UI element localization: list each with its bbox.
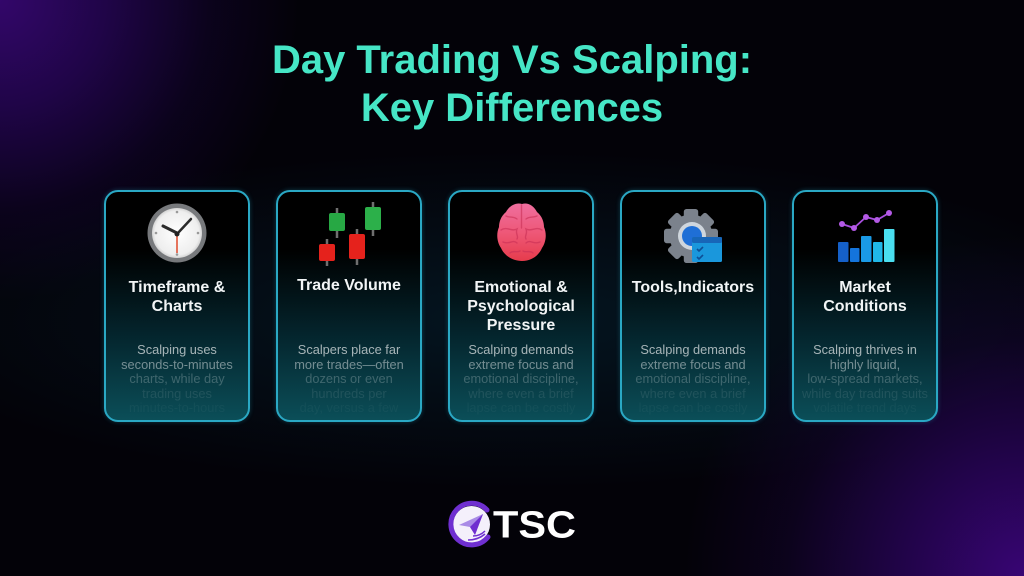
heading: Trade Volume <box>297 277 401 294</box>
heading: Charts <box>152 298 202 315</box>
panel: trade volume <box>276 190 422 422</box>
heading: Emotional & <box>474 279 568 296</box>
heading <box>128 279 225 315</box>
body text: Scalping thrives in <box>813 342 917 357</box>
body text: emotional discipline, <box>463 371 579 386</box>
panel: market conditions <box>792 190 938 422</box>
body text: while day trading suits <box>802 386 928 401</box>
body text: Scalping demands <box>468 342 574 357</box>
body text <box>802 342 928 415</box>
heading: Tools,Indicators <box>632 279 754 296</box>
heading: Psychological <box>467 298 575 315</box>
body text: Scalping uses <box>137 342 217 357</box>
body text: low-spread markets, <box>807 371 923 386</box>
icon: gear with checklist <box>664 209 722 263</box>
body text: extreme focus and <box>468 357 574 372</box>
body text: dozens or even <box>305 371 393 386</box>
body text: where even a brief <box>640 386 746 401</box>
body text: seconds-to-minutes <box>121 357 233 372</box>
body text: emotional discipline, <box>635 371 751 386</box>
title: Key Differences <box>361 86 663 130</box>
body text: lapse can be costly <box>467 400 575 415</box>
body text: minutes-to-hours <box>129 400 225 415</box>
body text <box>635 342 751 415</box>
body text <box>294 342 404 415</box>
icon: bar and line chart <box>838 210 894 262</box>
heading: Conditions <box>823 298 907 315</box>
title: Day Trading Vs Scalping: <box>272 38 752 82</box>
body text: extreme focus and <box>640 357 746 372</box>
body text: highly liquid, <box>830 357 900 372</box>
panel: tools and indicators <box>620 190 766 422</box>
icon: candlesticks <box>319 202 381 266</box>
icon: clock <box>148 204 206 262</box>
logo: TSC <box>448 500 576 548</box>
body text: where even a brief <box>468 386 574 401</box>
body text: more trades—often <box>294 357 404 372</box>
body text: trading uses <box>142 386 212 401</box>
body text: charts, while day <box>129 371 225 386</box>
panel: timeframe and charts <box>104 190 250 422</box>
heading: Pressure <box>487 317 555 334</box>
heading <box>823 279 907 315</box>
heading <box>467 279 575 334</box>
title <box>272 38 752 130</box>
heading: Market <box>839 279 891 296</box>
body text: Scalpers place far <box>298 342 400 357</box>
icon: brain <box>497 204 546 261</box>
body text: day, versus a few <box>300 400 398 415</box>
body text <box>121 342 233 415</box>
icon: logo mark <box>451 503 490 545</box>
body text: hundreds per <box>311 386 387 401</box>
body text: volatile trend days <box>813 400 917 415</box>
body text <box>463 342 579 415</box>
body text: lapse can be costly <box>639 400 747 415</box>
panel: emotional and psychological pressure <box>448 190 594 422</box>
heading: Timeframe & <box>129 279 225 296</box>
body text: Scalping demands <box>640 342 746 357</box>
logo wordmark: TSC <box>493 504 576 546</box>
